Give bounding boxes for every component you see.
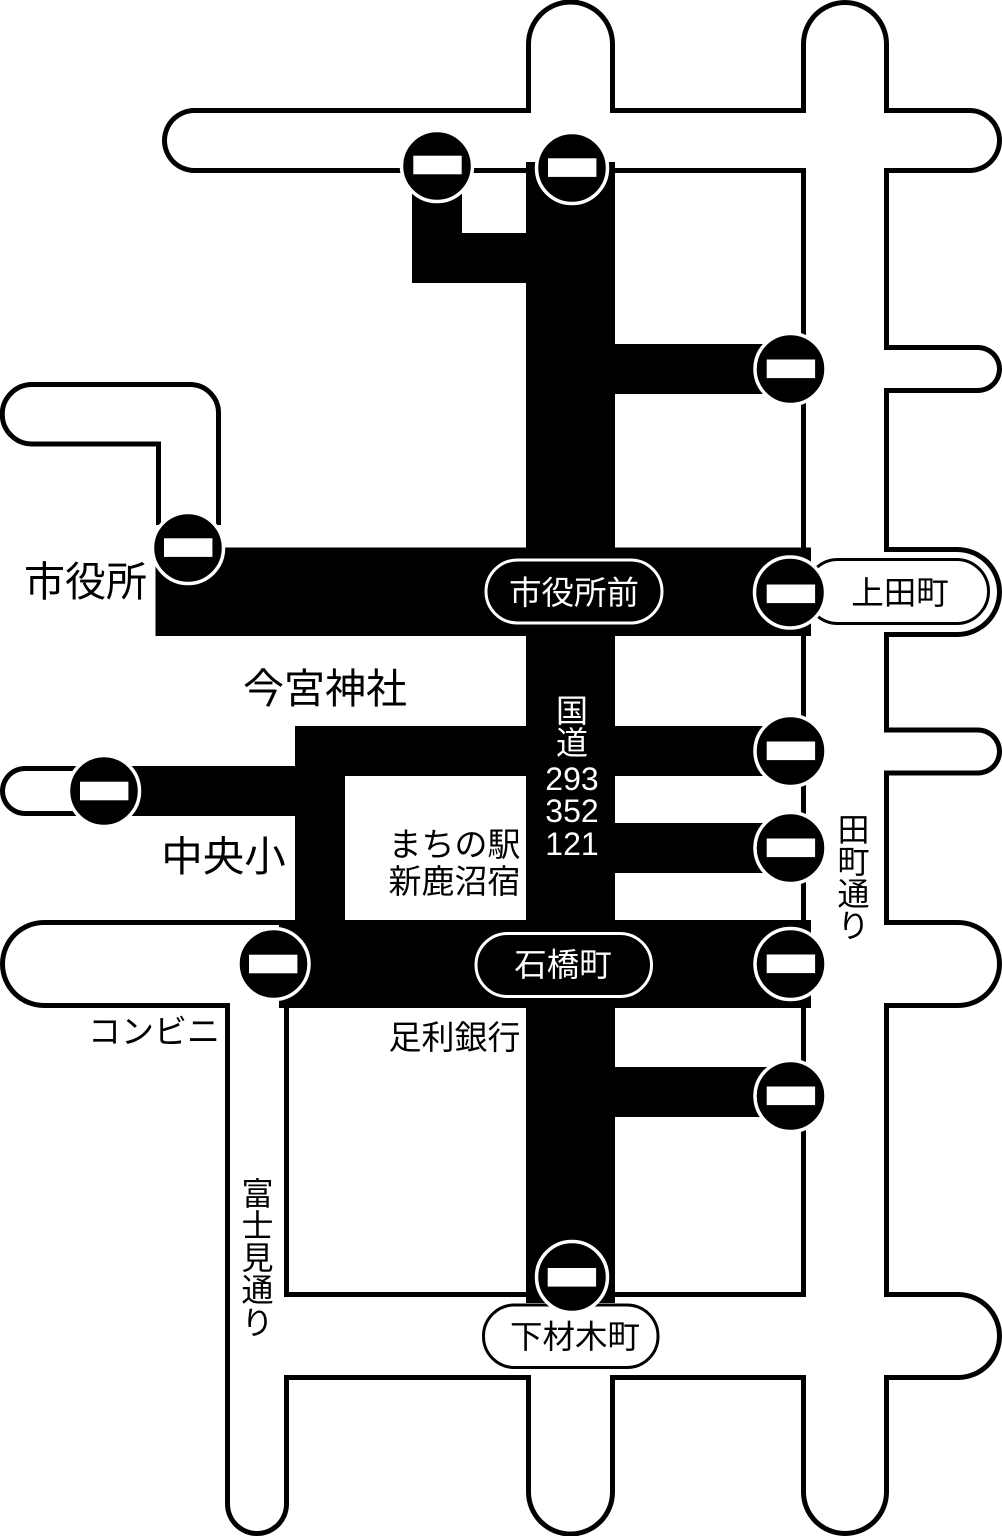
stop icon: [152, 512, 224, 584]
label: 石橋町: 石橋町: [514, 947, 612, 983]
label: 田町通り: 田: [837, 812, 870, 848]
stop icon: [755, 716, 826, 786]
pill: 市役所前: [486, 560, 662, 623]
label: まちの駅新鹿沼宿: 新鹿沼宿: [388, 863, 520, 900]
label: 富士見通り: 通: [241, 1272, 274, 1308]
label: 市役所前: 市役所前: [509, 575, 639, 611]
pill: 石橋町: [476, 934, 652, 996]
stop icon: [536, 1242, 608, 1312]
label: 市役所: 市役所: [24, 559, 147, 605]
label: 富士見通り: 士: [241, 1208, 274, 1244]
label: 上田町: 上田町: [851, 575, 949, 611]
stop icon: [755, 1060, 826, 1132]
stop icon: [68, 756, 140, 826]
label: 国道: 293: [545, 761, 599, 797]
stop icon: [755, 928, 826, 1000]
label: 国道: 国: [556, 693, 588, 729]
label: 国道: 352: [545, 793, 599, 829]
stop icon: [238, 928, 309, 1000]
label: 今宮神社: 今宮神社: [243, 666, 407, 712]
label: 田町通り: り: [837, 908, 870, 944]
label: 国道: 121: [545, 826, 599, 862]
label: まちの駅新鹿沼宿: まちの駅: [388, 826, 520, 863]
stop icon: [755, 812, 826, 884]
road: upper left bend: [2, 384, 219, 525]
label: 中央小: 中央小: [161, 833, 286, 880]
label: 田町通り: 通: [837, 876, 870, 912]
label: 田町通り: 町: [837, 844, 870, 880]
label: 富士見通り: 富: [241, 1176, 274, 1212]
pill: 下材木町: [484, 1305, 658, 1368]
label: 富士見通り: 見: [241, 1240, 274, 1276]
bus routes: [104, 162, 811, 1303]
label: 下材木町: 下材木町: [510, 1319, 640, 1355]
map labels: [24, 559, 949, 1355]
label: 足利銀行: 足利銀行: [388, 1019, 520, 1056]
label: 国道: 道: [556, 725, 588, 761]
pill: 上田町: [806, 560, 988, 624]
stop icon: [754, 557, 826, 628]
stop icon: [755, 334, 826, 404]
bus stop markers: [68, 130, 826, 1312]
label: コンビニ: コンビニ: [88, 1013, 220, 1050]
stop icon: [536, 132, 608, 204]
stop icon: [402, 130, 472, 202]
label: 富士見通り: り: [241, 1305, 274, 1341]
